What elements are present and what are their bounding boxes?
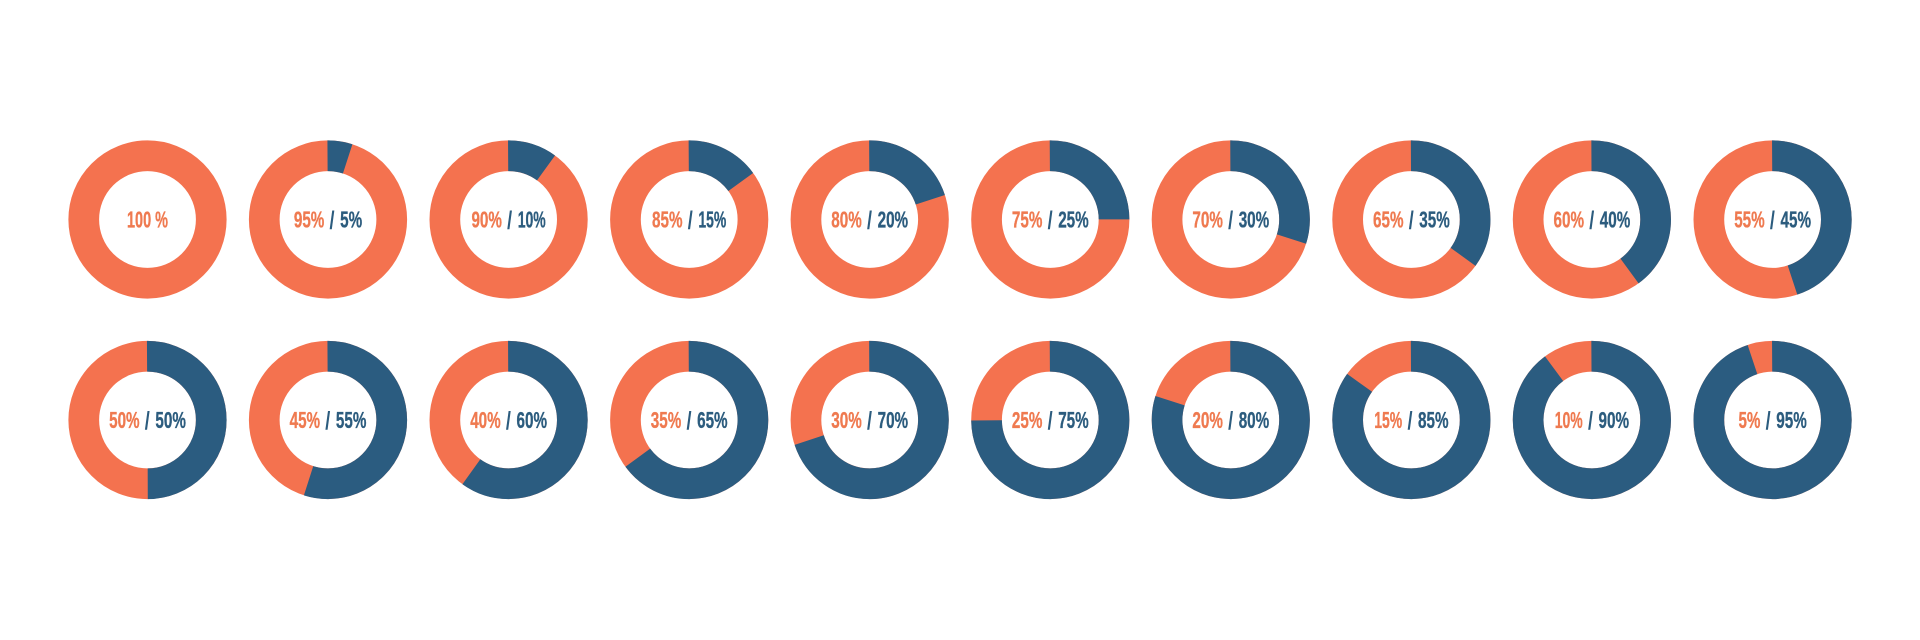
ring: orange base bbox=[264, 156, 392, 283]
label: 65% / 35% bbox=[1373, 206, 1450, 234]
segment: blue 70 bbox=[806, 356, 933, 484]
segment: blue 10 bbox=[445, 156, 572, 283]
label: 5% / 95%: / bbox=[1766, 407, 1771, 435]
label: 30% / 70%: 30% bbox=[831, 407, 862, 433]
label: 35% / 65% bbox=[651, 407, 728, 435]
ring: orange base bbox=[264, 356, 392, 484]
segment: blue 50 bbox=[84, 356, 211, 484]
label: 20% / 80% bbox=[1192, 407, 1269, 435]
label: 25% / 75%: / bbox=[1048, 407, 1053, 435]
label: 85% / 15%: 85% bbox=[652, 206, 683, 232]
label: 70% / 30%: / bbox=[1228, 206, 1233, 234]
label: 80% / 20%: 20% bbox=[878, 206, 908, 232]
donut 30/70 bbox=[806, 356, 933, 484]
label: 60% / 40%: 60% bbox=[1554, 206, 1584, 232]
donut 80/20 bbox=[806, 156, 933, 283]
label: 65% / 35%: / bbox=[1409, 206, 1414, 234]
donut 40/60 bbox=[445, 356, 572, 484]
donut 10/90 bbox=[1528, 356, 1656, 484]
label: 80% / 20% bbox=[831, 206, 908, 234]
label: 90% / 10%: / bbox=[507, 206, 512, 234]
label: 55% / 45% bbox=[1734, 206, 1811, 234]
label: 15% / 85%: 15% bbox=[1374, 407, 1402, 433]
donut 50/50 bbox=[84, 356, 211, 484]
label: 90% / 10% bbox=[471, 206, 546, 234]
label: 70% / 30%: 70% bbox=[1192, 206, 1223, 232]
label: 65% / 35%: 35% bbox=[1419, 206, 1450, 232]
segment: blue 25 bbox=[987, 156, 1114, 283]
label: 85% / 15%: 15% bbox=[698, 206, 726, 232]
label: 15% / 85%: / bbox=[1407, 407, 1412, 435]
label: 35% / 65%: 35% bbox=[651, 407, 681, 433]
label: 35% / 65%: / bbox=[687, 407, 692, 435]
donut 70/30 bbox=[1167, 156, 1295, 283]
label: 10% / 90% bbox=[1555, 407, 1629, 435]
label: 30% / 70%: 70% bbox=[878, 407, 908, 433]
segment: blue 5 bbox=[264, 156, 392, 283]
segment: blue 30 bbox=[1167, 156, 1295, 283]
label: 60% / 40%: 40% bbox=[1600, 206, 1630, 232]
segment: blue 15 bbox=[625, 156, 753, 283]
label: 45% / 55% bbox=[290, 407, 366, 435]
label: 40% / 60% bbox=[470, 407, 547, 435]
donut 95/5 bbox=[264, 156, 392, 283]
label: 80% / 20%: 80% bbox=[831, 206, 862, 232]
label: 40% / 60%: 40% bbox=[470, 407, 501, 433]
ring: orange base bbox=[1709, 156, 1836, 283]
donut 20/80 bbox=[1167, 356, 1295, 484]
ring: orange base bbox=[1528, 356, 1656, 484]
label: 65% / 35%: 65% bbox=[1373, 206, 1404, 232]
ring: orange base bbox=[1167, 356, 1295, 484]
label: 20% / 80%: 80% bbox=[1239, 407, 1269, 433]
label: 60% / 40% bbox=[1554, 206, 1630, 234]
donut 45/55 bbox=[264, 356, 392, 484]
donut 75/25 bbox=[987, 156, 1114, 283]
donut 60/40 bbox=[1528, 156, 1656, 283]
label: 35% / 65%: 65% bbox=[697, 407, 728, 433]
label: 40% / 60%: / bbox=[506, 407, 511, 435]
segment: blue 85 bbox=[1348, 356, 1475, 484]
label: 90% / 10%: 10% bbox=[518, 206, 546, 232]
label: 55% / 45%: 45% bbox=[1780, 206, 1811, 232]
donut 25/75 bbox=[987, 356, 1114, 484]
label: 10% / 90%: 90% bbox=[1599, 407, 1629, 433]
segment: blue 60 bbox=[445, 356, 572, 484]
ring: orange base bbox=[625, 156, 753, 283]
donut 55/45 bbox=[1709, 156, 1836, 283]
label: 95% / 5%: 95% bbox=[294, 206, 324, 232]
segment: blue 35 bbox=[1348, 156, 1475, 283]
label: 85% / 15% bbox=[652, 206, 726, 234]
label: 95% / 5%: 5% bbox=[340, 206, 362, 232]
label: 45% / 55%: 45% bbox=[290, 407, 320, 433]
label: 25% / 75%: 75% bbox=[1058, 407, 1089, 433]
donut 90/10 bbox=[445, 156, 572, 283]
label: 15% / 85% bbox=[1374, 407, 1449, 435]
segment: blue 20 bbox=[806, 156, 933, 283]
label: 55% / 45%: / bbox=[1770, 206, 1775, 234]
label: 30% / 70%: / bbox=[867, 407, 872, 435]
label: 5% / 95%: 95% bbox=[1776, 407, 1807, 433]
segment: blue 65 bbox=[625, 356, 753, 484]
label: 80% / 20%: / bbox=[867, 206, 872, 234]
ring: orange 100 bbox=[84, 156, 211, 283]
ring: orange base bbox=[987, 156, 1114, 283]
label: 50% / 50% bbox=[109, 407, 186, 435]
donut 65/35 bbox=[1348, 156, 1475, 283]
label: 75% / 25%: 25% bbox=[1058, 206, 1089, 232]
label: 25% / 75% bbox=[1012, 407, 1089, 435]
label: 100 %: 100 % bbox=[127, 206, 168, 232]
label: 90% / 10%: 90% bbox=[471, 206, 502, 232]
label: 95% / 5%: / bbox=[330, 206, 335, 234]
label: 45% / 55%: 55% bbox=[336, 407, 366, 433]
label: 10% / 90%: / bbox=[1588, 407, 1593, 435]
label: 70% / 30%: 30% bbox=[1239, 206, 1269, 232]
label: 75% / 25%: / bbox=[1048, 206, 1053, 234]
label: 10% / 90%: 10% bbox=[1555, 407, 1583, 433]
label: 75% / 25%: 75% bbox=[1012, 206, 1042, 232]
donut 5/95 bbox=[1709, 356, 1836, 484]
donut 15/85 bbox=[1348, 356, 1475, 484]
ring: orange base bbox=[84, 356, 211, 484]
ring: orange base bbox=[1167, 156, 1295, 283]
label: 85% / 15%: / bbox=[688, 206, 693, 234]
ring: orange base bbox=[987, 356, 1114, 484]
label: 70% / 30% bbox=[1192, 206, 1269, 234]
segment: blue 90 bbox=[1528, 356, 1656, 484]
donut 100% bbox=[84, 156, 211, 283]
segment: blue 95 bbox=[1709, 356, 1836, 484]
ring: orange base bbox=[1348, 356, 1475, 484]
label: 50% / 50%: 50% bbox=[155, 407, 186, 433]
label: 75% / 25% bbox=[1012, 206, 1089, 234]
label: 40% / 60%: 60% bbox=[517, 407, 547, 433]
segment: blue 80 bbox=[1167, 356, 1295, 484]
label: 95% / 5% bbox=[294, 206, 362, 234]
ring: orange base bbox=[806, 356, 933, 484]
label: 15% / 85%: 85% bbox=[1418, 407, 1449, 433]
ring: orange base bbox=[806, 156, 933, 283]
ring: orange base bbox=[1528, 156, 1656, 283]
donut 85/15 bbox=[625, 156, 753, 283]
segment: blue 40 bbox=[1528, 156, 1656, 283]
ring: orange base bbox=[625, 356, 753, 484]
label: 20% / 80%: / bbox=[1228, 407, 1233, 435]
label: 20% / 80%: 20% bbox=[1192, 407, 1223, 433]
label: 60% / 40%: / bbox=[1589, 206, 1594, 234]
label: 30% / 70% bbox=[831, 407, 908, 435]
label: 55% / 45%: 55% bbox=[1734, 206, 1765, 232]
label: 25% / 75%: 25% bbox=[1012, 407, 1042, 433]
ring: orange base bbox=[445, 156, 572, 283]
label: 50% / 50%: 50% bbox=[109, 407, 140, 433]
label: 45% / 55%: / bbox=[325, 407, 330, 435]
segment: blue 55 bbox=[264, 356, 392, 484]
segment: blue 75 bbox=[987, 356, 1114, 484]
donut 35/65 bbox=[625, 356, 753, 484]
ring: orange base bbox=[1348, 156, 1475, 283]
label: 5% / 95%: 5% bbox=[1738, 407, 1760, 433]
ring: orange base bbox=[445, 356, 572, 484]
ring: orange base bbox=[1709, 356, 1836, 484]
label: 50% / 50%: / bbox=[145, 407, 150, 435]
segment: blue 45 bbox=[1709, 156, 1836, 283]
label: 5% / 95% bbox=[1738, 407, 1807, 435]
